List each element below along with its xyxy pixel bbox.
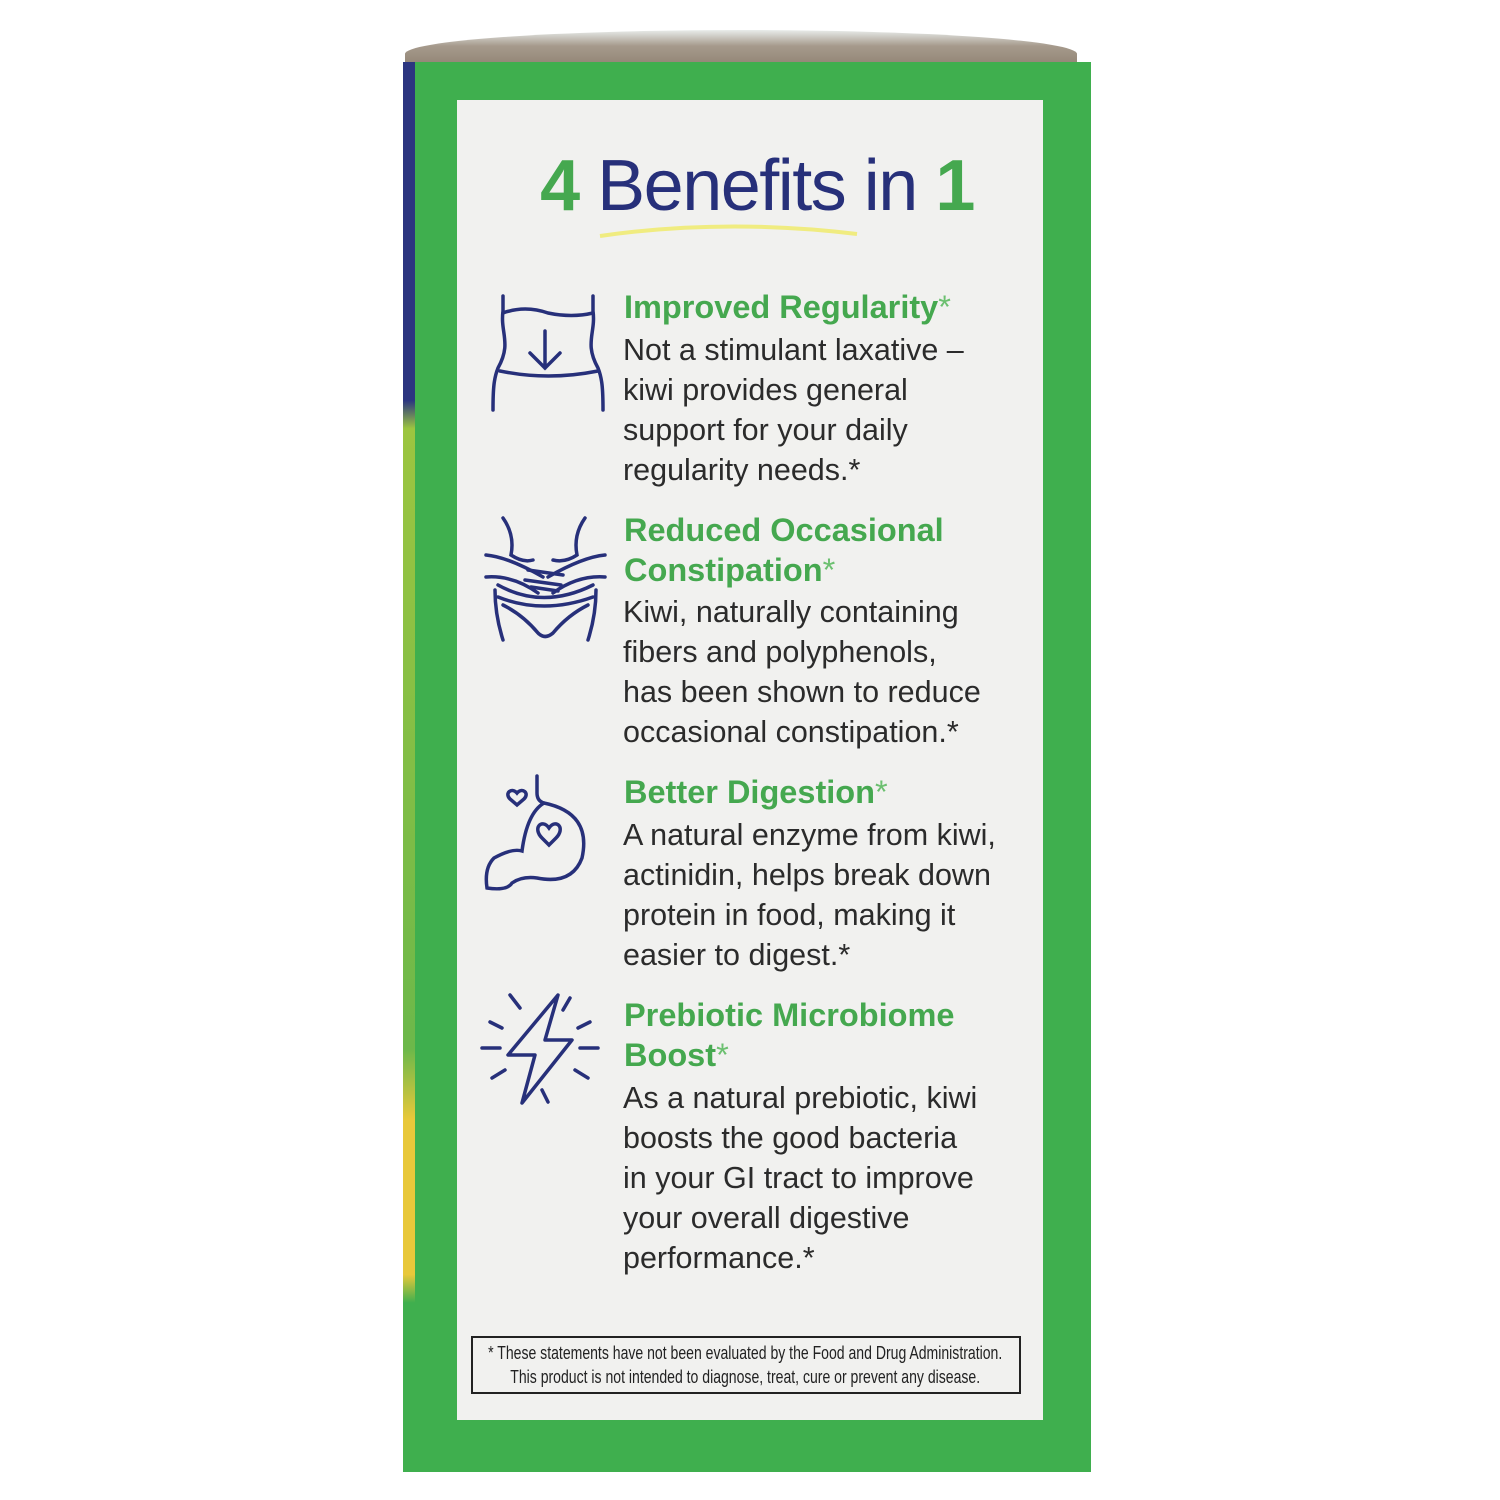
text: has been shown to reduce — [623, 675, 981, 709]
box body — [403, 62, 1091, 1472]
disclaimer box: * These statements have not been evaluated by the Food and Drug Administration. — [488, 1343, 1002, 1363]
text: Kiwi, naturally containing — [623, 595, 959, 629]
text: boosts the good bacteria — [623, 1121, 957, 1155]
box lid — [405, 30, 1077, 70]
disclaimer box — [471, 1336, 1021, 1394]
text: actinidin, helps break down — [623, 858, 991, 892]
title underline swoosh — [600, 224, 858, 238]
icon: hands on belly — [484, 516, 607, 642]
text: Not a stimulant laxative – — [623, 333, 964, 367]
text: Improved Regularity* — [624, 289, 951, 325]
left edge stripe — [403, 62, 415, 1472]
text: fibers and polyphenols, — [623, 635, 937, 669]
benefit 1 — [623, 289, 964, 487]
text: regularity needs.* — [623, 453, 860, 487]
text: Prebiotic Microbiome — [624, 997, 954, 1033]
title: 4 Benefits in 1 — [540, 146, 974, 226]
text: Boost* — [624, 1037, 729, 1073]
text: easier to digest.* — [623, 938, 850, 972]
text: support for your daily — [623, 413, 908, 447]
text: occasional constipation.* — [623, 715, 959, 749]
text: Reduced Occasional — [624, 512, 944, 548]
text: As a natural prebiotic, kiwi — [623, 1081, 977, 1115]
text: in your GI tract to improve — [623, 1161, 974, 1195]
inner white panel — [457, 100, 1043, 1420]
icon: lightning bolt — [480, 993, 600, 1105]
benefit 3 — [623, 774, 996, 972]
disclaimer box: This product is not intended to diagnose, treat, cure or prevent any disease. — [510, 1367, 980, 1387]
text: Constipation* — [624, 552, 835, 588]
icon: belly with down arrow — [491, 294, 605, 412]
text: performance.* — [623, 1241, 815, 1275]
benefit 4 — [623, 997, 977, 1275]
text: kiwi provides general — [623, 373, 908, 407]
icon: stomach with hearts — [484, 774, 586, 890]
text: Better Digestion* — [624, 774, 888, 810]
benefit 2 — [623, 512, 981, 749]
text: protein in food, making it — [623, 898, 955, 932]
text: your overall digestive — [623, 1201, 910, 1235]
text: A natural enzyme from kiwi, — [623, 818, 996, 852]
